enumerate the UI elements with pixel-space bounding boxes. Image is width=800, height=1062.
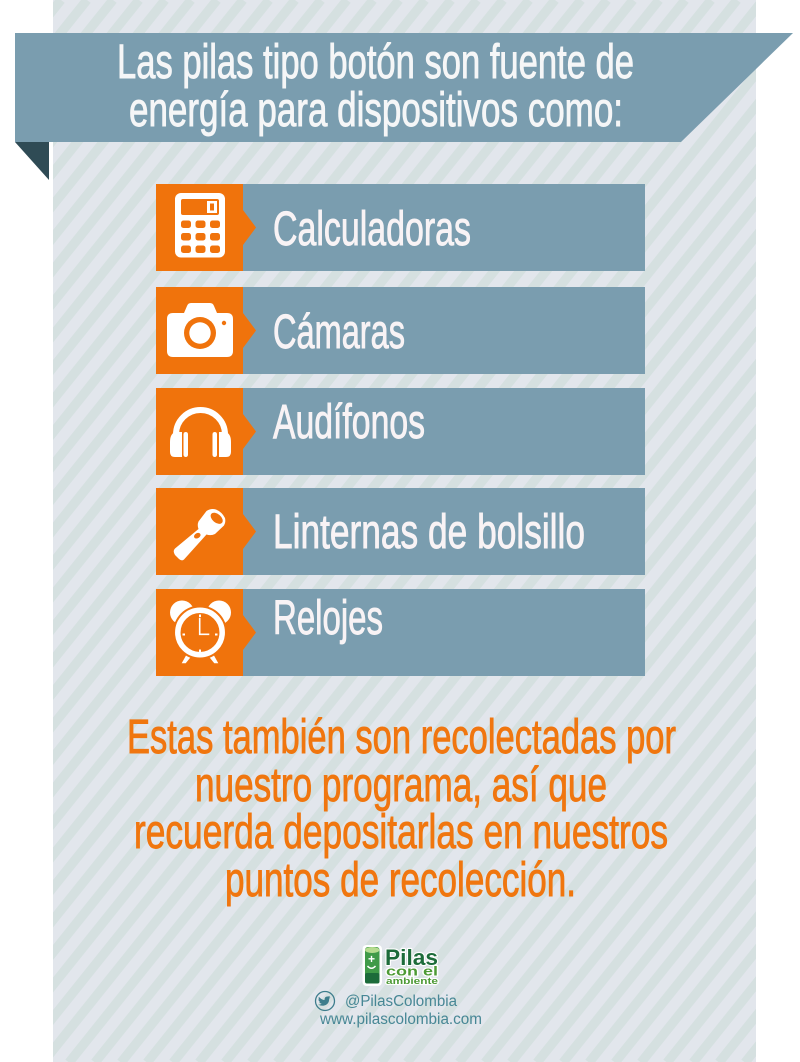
row: audífonos xyxy=(156,388,645,475)
orange message: puntos de recolección. xyxy=(225,854,576,907)
website: www.pilascolombia.com xyxy=(319,1011,482,1028)
label: Linternas de bolsillo xyxy=(273,506,585,559)
label: Audífonos xyxy=(273,396,425,449)
icon: headphones xyxy=(170,410,231,457)
title: energía para dispositivos como: xyxy=(129,84,623,137)
ribbon fold xyxy=(15,142,49,180)
logo wordmark: Pilas xyxy=(385,945,438,970)
logo wordmark: con el xyxy=(386,964,438,978)
icon: flashlight xyxy=(174,509,225,560)
icon: camera xyxy=(167,303,233,357)
row: linternas xyxy=(156,488,645,575)
orange message xyxy=(127,711,676,907)
banner ribbon xyxy=(15,33,793,180)
icon: alarm clock xyxy=(170,600,231,663)
label: Calculadoras xyxy=(273,203,471,256)
logo wordmark: ambiente xyxy=(386,976,438,987)
logo: Pilas con el ambiente xyxy=(362,945,438,987)
label: Relojes xyxy=(273,592,383,645)
row: cámaras xyxy=(156,287,645,374)
label: Cámaras xyxy=(273,306,405,359)
logo wordmark xyxy=(385,945,438,987)
orange message: nuestro programa, así que xyxy=(195,759,607,812)
title xyxy=(117,36,634,137)
row: relojes xyxy=(156,589,645,676)
social: twitter xyxy=(316,992,457,1010)
icon: twitter bird xyxy=(316,992,334,1010)
row: calculadoras xyxy=(156,184,645,271)
battery: + xyxy=(368,952,375,966)
twitter handle: @PilasColombia xyxy=(345,993,457,1010)
icon: calculator xyxy=(175,193,225,258)
